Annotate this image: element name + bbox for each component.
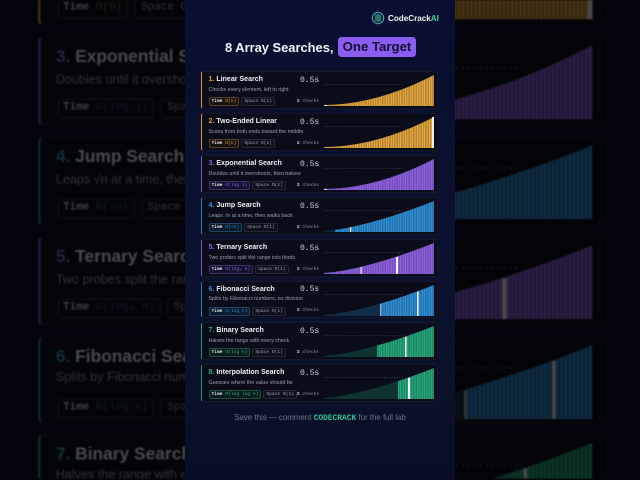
title highlight xyxy=(338,37,416,57)
card 2: two-ended linear: Time O(n) xyxy=(212,141,236,146)
card 5: ternary search: 5. Ternary Search xyxy=(208,244,267,251)
card 3: exponential search: 3. Exponential Search xyxy=(208,160,282,167)
card 4: jump search: 4. Jump Search xyxy=(208,202,261,209)
blurred enlarged background copy of the cards: Space O(1) xyxy=(167,103,233,114)
blurred enlarged background copy of the cards: Leaps √n at a time, then walks back xyxy=(56,173,256,187)
card 3: exponential search: Doubles until it overshoots, then halves xyxy=(208,170,301,176)
card 6: fibonacci search: 2 checks xyxy=(297,308,319,313)
card 6: fibonacci search: 6. Fibonacci Search xyxy=(208,286,275,292)
card 8: interpolation search: 8. Interpolation Search xyxy=(208,369,284,376)
card 4: jump search: Leaps √n at a time, then walks back xyxy=(208,212,293,218)
card 5: ternary search: Two probes split the range into thirds xyxy=(208,254,295,260)
card 7: binary search: Time O(log n) xyxy=(212,350,247,355)
card 6: fibonacci search: Splits by Fibonacci numbers, no division xyxy=(208,296,303,302)
title highlight: One Target xyxy=(343,39,411,54)
blurred enlarged background copy of the cards: Space O(1) xyxy=(148,202,213,214)
card 3: exponential search: Time O(log i) xyxy=(212,183,247,188)
card 5: ternary search xyxy=(201,239,438,276)
footer call to action: Save this — comment CODECRACK for the full lab xyxy=(234,413,406,423)
card 7: binary search: Space O(1) xyxy=(255,350,283,355)
card 2: two-ended linear xyxy=(201,113,438,150)
card 8: interpolation search: 0.5s xyxy=(300,368,319,378)
blurred enlarged background copy of the cards: Space O(1) xyxy=(141,3,207,14)
blurred enlarged background copy of the cards: Space O(1) xyxy=(174,302,240,314)
card 2: two-ended linear: 2. Two-Ended Linear xyxy=(208,118,277,125)
brand name: CodeCrackAI xyxy=(388,14,439,22)
card 5: ternary search: Time O(log₃ n) xyxy=(212,267,250,272)
card 5: ternary search: 0.5s xyxy=(300,244,319,252)
title text: 8 Array Searches, xyxy=(225,40,333,55)
card 7: binary search: 7. Binary Search xyxy=(208,327,264,334)
card 3: exponential search: 2 checks xyxy=(297,182,319,188)
card 7: binary search: 0.5s xyxy=(300,326,319,336)
card 3: exponential search xyxy=(201,155,438,192)
card 4: jump search: Time O(√n) xyxy=(212,225,239,230)
blurred enlarged background copy of the cards: 3. Exponential Search xyxy=(56,45,236,67)
card 6: fibonacci search xyxy=(201,280,438,318)
card 1: linear search: 2 checks xyxy=(297,98,319,104)
card 5: ternary search: 2 checks xyxy=(297,266,319,272)
card 2: two-ended linear: Scans from both ends toward the middle xyxy=(208,128,303,134)
blurred enlarged background copy of the cards: Time O(log₃ n) xyxy=(63,302,155,314)
blurred enlarged background copy of the cards: 5. Ternary Search xyxy=(56,245,200,267)
blurred enlarged background copy of the cards: Time O(log i) xyxy=(63,103,148,114)
card 3: exponential search: Space O(1) xyxy=(255,183,283,188)
card 1: linear search: Space O(1) xyxy=(244,99,272,104)
brand logo xyxy=(372,12,439,24)
card 1: linear search: Time O(n) xyxy=(212,99,236,104)
blurred enlarged background copy of the cards: Time O(log n) xyxy=(63,401,148,413)
card 6: fibonacci search: Space O(1) xyxy=(255,308,283,314)
card 4: jump search: 2 checks xyxy=(297,224,319,230)
title xyxy=(225,37,416,57)
card 3: exponential search: 0.5s xyxy=(300,160,319,168)
card 8: interpolation search: Time O(log log n) xyxy=(212,392,258,397)
card 1: linear search: 1. Linear Search xyxy=(208,76,263,83)
blurred enlarged background copy of the cards: Space O(1) xyxy=(167,401,233,413)
blurred enlarged background copy of the cards: Time O(√n) xyxy=(63,202,129,214)
card 4: jump search: Space O(1) xyxy=(247,225,275,230)
central panel background xyxy=(185,0,455,480)
card 1: linear search xyxy=(201,71,438,108)
blurred enlarged background copy of the cards: 7. Binary Search xyxy=(56,443,192,464)
card 1: linear search: Checks every element, left to right xyxy=(208,86,289,92)
card 6: fibonacci search: Time O(log n) xyxy=(212,308,247,314)
card 7: binary search xyxy=(201,322,438,360)
blurred enlarged background copy of the cards: Two probes split the range into thirds xyxy=(56,273,262,287)
card 6: fibonacci search: 0.5s xyxy=(300,285,319,294)
card 2: two-ended linear: 2 checks xyxy=(297,140,319,146)
blurred enlarged background copy of the cards: Time O(n) xyxy=(63,3,122,14)
card 1: linear search: 0.5s xyxy=(300,76,319,84)
card 2: two-ended linear: Space O(1) xyxy=(244,141,272,146)
card 4: jump search: 0.5s xyxy=(300,202,319,210)
blurred enlarged background copy of the cards: Doubles until it overshoots, then halves xyxy=(56,73,275,87)
card 8: interpolation search: Guesses where the value should be xyxy=(208,380,293,386)
card 8: interpolation search: Space O(1) xyxy=(266,392,294,397)
blurred enlarged background copy of the cards: 6. Fibonacci Search xyxy=(56,344,219,366)
blurred enlarged background copy of the cards: Splits by Fibonacci numbers, no division xyxy=(56,371,280,386)
card 2: two-ended linear: 0.5s xyxy=(300,118,319,126)
icon: logo circle xyxy=(372,12,384,24)
card 8: interpolation search xyxy=(201,364,438,402)
card 7: binary search: 2 checks xyxy=(297,350,319,354)
card 4: jump search xyxy=(201,197,438,234)
card 7: binary search: Halves the range with every check xyxy=(208,338,289,344)
card 8: interpolation search: 2 checks xyxy=(297,392,319,396)
blurred enlarged background copy of the cards: 4. Jump Search xyxy=(56,145,184,167)
card 5: ternary search: Space O(1) xyxy=(258,267,286,272)
